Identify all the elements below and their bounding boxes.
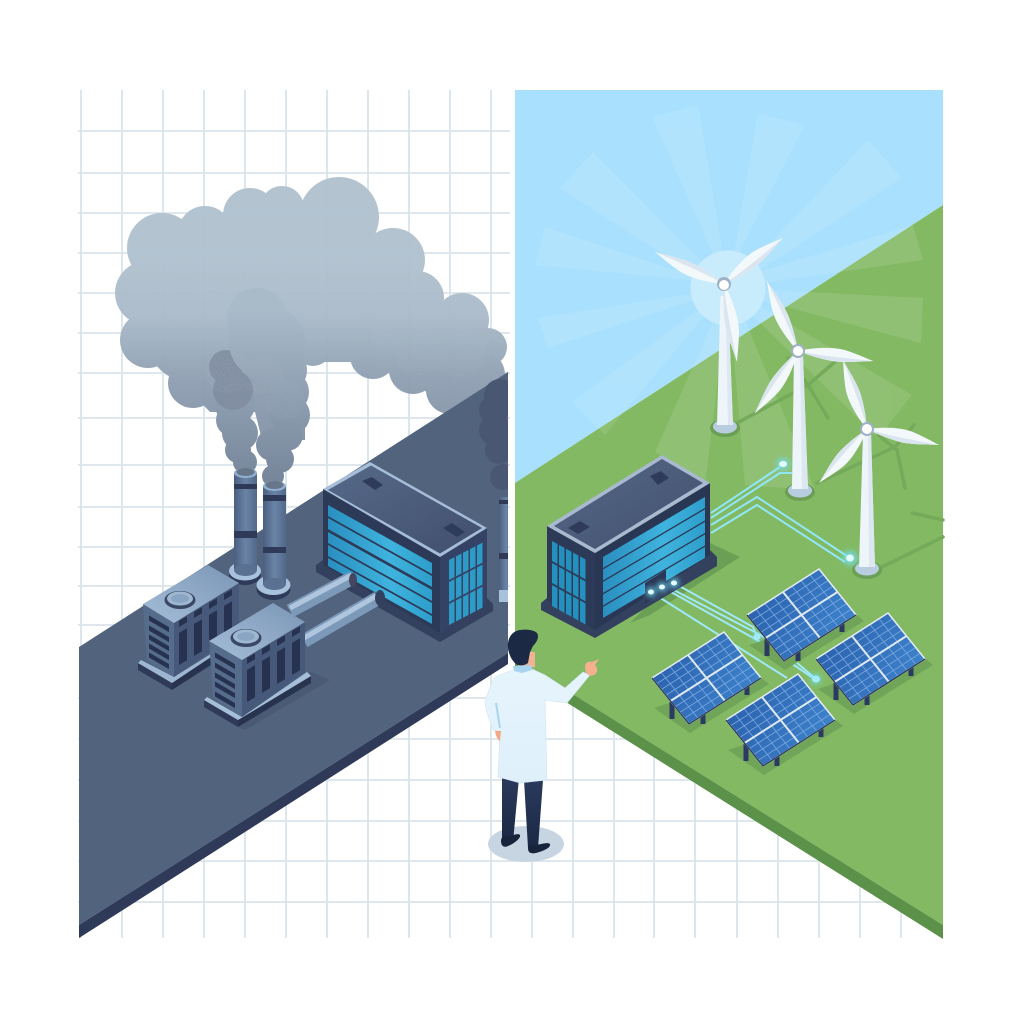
infographic scene: [78, 90, 945, 939]
smoke: main plume: [115, 177, 507, 440]
coal plant building: [316, 462, 493, 642]
dark smoke over platform: [479, 379, 508, 490]
turbine shadows: [737, 358, 943, 568]
right smokestack: [256, 481, 290, 600]
left smokestack: [229, 468, 261, 585]
neck: [518, 652, 535, 669]
fossil fuel platform: [79, 372, 508, 938]
smoke: dark mottled puff: [209, 350, 253, 410]
solar panel left: [652, 632, 769, 733]
coat sleeve detail: [496, 703, 500, 728]
generator unit one: [138, 565, 239, 690]
green ground platform: [515, 205, 943, 939]
smoke: stippled grain: [207, 350, 450, 419]
generator unit two: [204, 603, 330, 730]
lab coat: [485, 668, 590, 783]
sky panel: [515, 90, 943, 483]
smoke: left chimney column: [216, 412, 258, 470]
hair: [508, 630, 538, 665]
raised hand: [585, 659, 599, 676]
wind turbine two: [750, 278, 874, 501]
partial chimney at panel edge: [499, 497, 508, 602]
sun rays: [535, 105, 923, 490]
collar: [513, 665, 532, 673]
wind turbine one: [652, 232, 787, 437]
scientist figure: [485, 630, 599, 862]
smoke cloud from chimneys: [115, 177, 507, 487]
solar panel bottom: [726, 674, 843, 775]
glowing wires to turbines: [711, 467, 847, 562]
wire glow nodes: [646, 458, 857, 684]
smoke: right chimney column: [230, 350, 310, 484]
shoes: [501, 834, 550, 853]
floor shadow: [488, 826, 564, 862]
renewable control building: [541, 455, 717, 638]
sun: [690, 250, 766, 326]
solar panel right: [816, 613, 933, 714]
building shadow on grass: [630, 543, 740, 623]
solar panel top: [747, 569, 864, 670]
wind turbine three: [815, 358, 941, 579]
other hand: [495, 731, 501, 741]
glowing wires to solar panels: [651, 583, 816, 679]
pipes to plant: [290, 573, 385, 641]
trousers: [502, 778, 543, 848]
background grid: [78, 90, 943, 938]
